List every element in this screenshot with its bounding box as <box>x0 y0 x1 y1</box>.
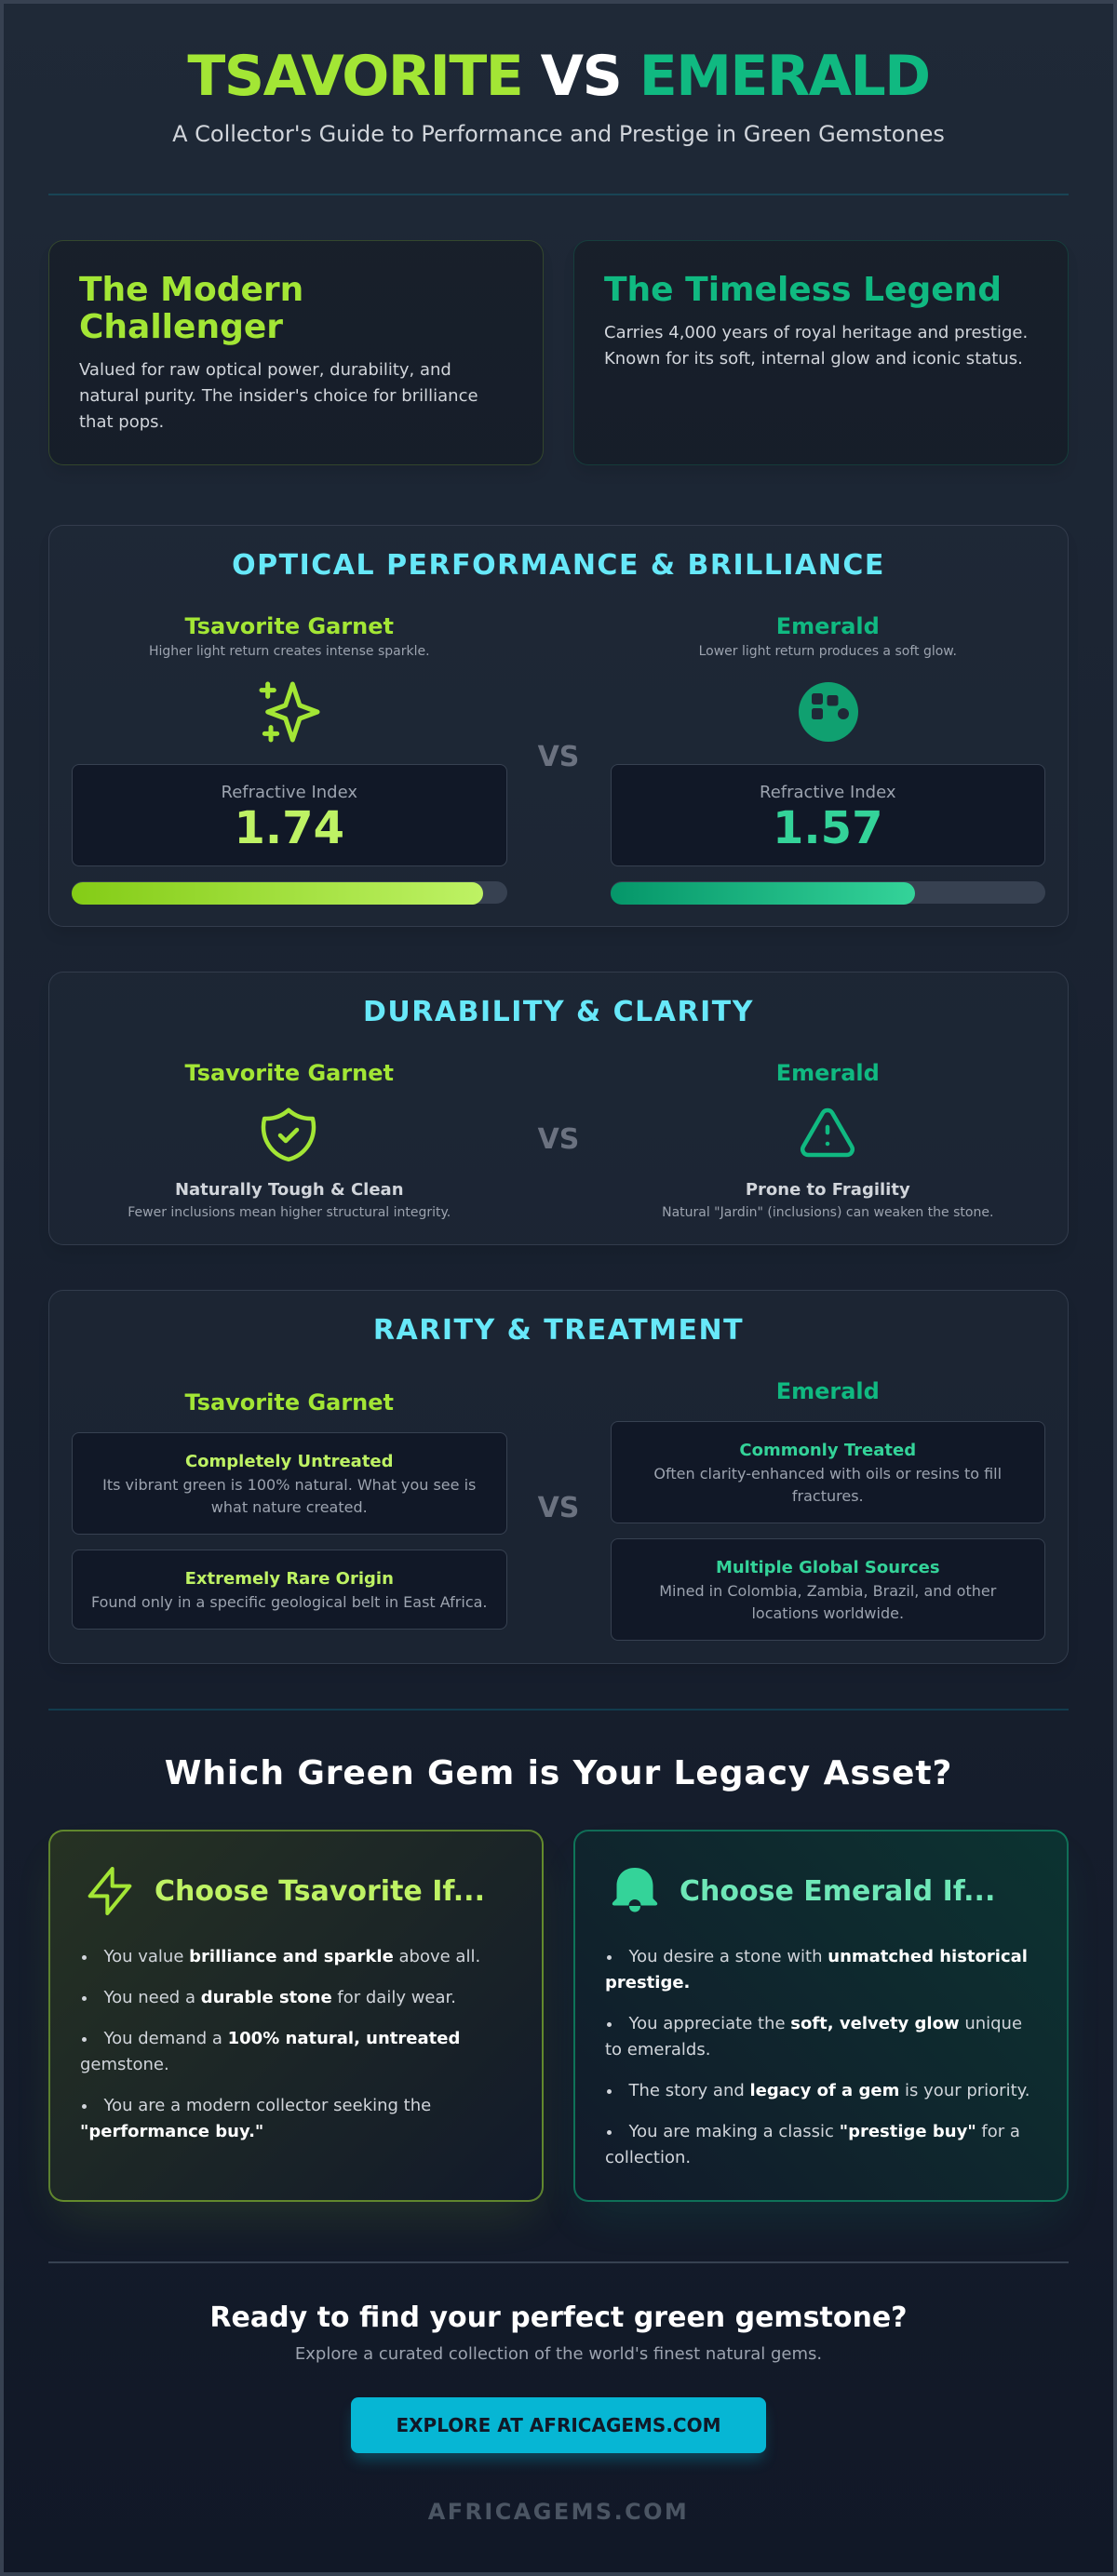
button: explore: EXPLORE AT AFRICAGEMS.COM <box>396 2414 721 2436</box>
text: sparkle note: Higher light return creates intense sparkle. <box>149 644 430 659</box>
text: challenger description <box>79 360 478 432</box>
panel: optical performance <box>48 525 1069 927</box>
text: legend description: Known for its soft, internal glow and iconic status. <box>604 349 1023 369</box>
stat: tsavorite refractive index <box>72 764 506 866</box>
progress bar: tsavorite <box>72 881 506 904</box>
vs badge: VS <box>538 741 579 773</box>
list: tsavorite reasons <box>80 1947 480 2141</box>
vs badge: VS <box>538 1492 579 1524</box>
card: multiple global sources <box>611 1538 1045 1641</box>
panel: durability and clarity <box>48 972 1069 1245</box>
list: emerald reasons: You are making a classic "prestige buy" for a collection. <box>605 2122 1020 2167</box>
text: call to action note: Explore a curated collection of the world's finest natural gems. <box>295 2344 822 2364</box>
heading: durability: DURABILITY & CLARITY <box>363 996 754 1028</box>
name: tsavorite garnet: Tsavorite Garnet <box>184 1060 394 1086</box>
text: glow note: Lower light return produces a soft glow. <box>699 644 957 659</box>
progress bar: emerald <box>611 881 1045 904</box>
heading: rarity: RARITY & TREATMENT <box>373 1314 744 1347</box>
list: tsavorite reasons: You need a durable stone for daily wear. <box>104 1988 456 2007</box>
column: emerald optical <box>611 613 1045 905</box>
text: jardin: Natural "Jardin" (inclusions) can weaken the stone. <box>662 1205 993 1220</box>
card text: Often clarity-enhanced with oils or resins to fill fractures. <box>653 1465 1002 1505</box>
column: tsavorite rarity <box>72 1389 507 1630</box>
label: refractive index: Refractive Index <box>760 783 895 802</box>
icon: lightning bolt <box>87 1867 132 1915</box>
list: tsavorite reasons: You are a modern collector seeking the "performance buy." <box>80 2096 431 2141</box>
name: emerald: Emerald <box>776 1060 880 1086</box>
heading: optical performance: OPTICAL PERFORMANCE & BRILLIANCE <box>232 549 885 582</box>
vs badge: VS <box>538 1123 579 1156</box>
card title: Multiple Global Sources <box>716 1558 940 1577</box>
icon: bell <box>612 1868 657 1912</box>
panel: the timeless legend <box>573 240 1069 465</box>
value: 1.57: 1.57 <box>773 802 882 854</box>
name: emerald: Emerald <box>776 1378 880 1404</box>
card title: Commonly Treated <box>739 1441 916 1460</box>
label: refractive index: Refractive Index <box>222 783 357 802</box>
panel: choose emerald <box>573 1830 1069 2202</box>
icon: warning triangle <box>801 1107 855 1158</box>
list: emerald reasons: You appreciate the soft, velvety glow unique to emeralds. <box>605 2014 1022 2059</box>
column: emerald rarity <box>611 1378 1045 1641</box>
name: emerald: Emerald <box>776 613 880 639</box>
text: challenger description: natural purity. The insider's choice for brilliance <box>79 386 478 406</box>
list: emerald reasons: You desire a stone with unmatched historical prestige. <box>605 1947 1028 1992</box>
icon: shield check <box>261 1107 316 1161</box>
text: challenger description: that pops. <box>79 412 164 432</box>
card: extremely rare origin <box>72 1550 506 1630</box>
heading: the modern challenger: Challenger <box>79 308 283 346</box>
subtitle: A Collector's Guide to Performance and Prestige in Green Gemstones <box>172 121 945 147</box>
stat: emerald refractive index <box>611 764 1045 866</box>
heading: call to action: Ready to find your perfect green gemstone? <box>209 2301 908 2334</box>
button: explore <box>351 2397 766 2453</box>
card: completely untreated <box>72 1432 506 1535</box>
icon: sparkles <box>259 681 320 743</box>
text: tough and clean: Naturally Tough & Clean <box>175 1180 404 1200</box>
list: tsavorite reasons: You value brilliance and sparkle above all. <box>104 1947 480 1966</box>
card text: Its vibrant green is 100% natural. What you see is what nature created. <box>102 1476 476 1516</box>
text: legend description <box>604 323 1028 369</box>
list: tsavorite reasons: You demand a 100% natural, untreated gemstone. <box>80 2029 460 2074</box>
heading: the timeless legend: The Timeless Legend <box>604 271 1002 309</box>
column: tsavorite durability <box>128 1060 451 1220</box>
column: tsavorite optical <box>72 613 507 905</box>
list: emerald reasons <box>605 1947 1030 2167</box>
title: TSAVORITE VS EMERALD <box>187 44 930 109</box>
card title: Completely Untreated <box>185 1452 394 1471</box>
value: 1.74: 1.74 <box>235 802 344 854</box>
heading: legacy asset question: Which Green Gem is Your Legacy Asset? <box>165 1754 952 1792</box>
card text: Mined in Colombia, Zambia, Brazil, and other locations worldwide. <box>659 1582 996 1622</box>
card: commonly treated <box>611 1421 1045 1523</box>
heading: choose tsavorite: Choose Tsavorite If... <box>155 1875 485 1908</box>
text: fewer inclusions: Fewer inclusions mean higher structural integrity. <box>128 1205 451 1220</box>
text: challenger description: Valued for raw optical power, durability, and <box>79 360 451 380</box>
heading: the modern challenger <box>79 271 303 346</box>
panel: rarity and treatment <box>48 1290 1069 1664</box>
bar fill: tsavorite 95% <box>72 882 483 905</box>
name: tsavorite garnet: Tsavorite Garnet <box>184 1389 394 1415</box>
heading: choose emerald: Choose Emerald If... <box>680 1875 995 1908</box>
brand footer: AFRICAGEMS.COM <box>428 2499 689 2525</box>
text: legend description: Carries 4,000 years of royal heritage and prestige. <box>604 323 1028 342</box>
panel: the modern challenger <box>48 240 544 465</box>
text: prone to fragility: Prone to Fragility <box>746 1180 910 1200</box>
card text: Found only in a specific geological belt in East Africa. <box>91 1593 488 1611</box>
column: emerald durability <box>662 1060 993 1220</box>
name: tsavorite garnet: Tsavorite Garnet <box>184 613 394 639</box>
heading: the modern challenger: The Modern <box>79 271 303 309</box>
card title: Extremely Rare Origin <box>185 1569 394 1589</box>
bar fill: emerald 70% <box>611 882 915 905</box>
list: emerald reasons: The story and legacy of a gem is your priority. <box>629 2081 1030 2100</box>
panel: choose tsavorite <box>48 1830 544 2202</box>
icon: emerald gem disc <box>799 682 858 742</box>
